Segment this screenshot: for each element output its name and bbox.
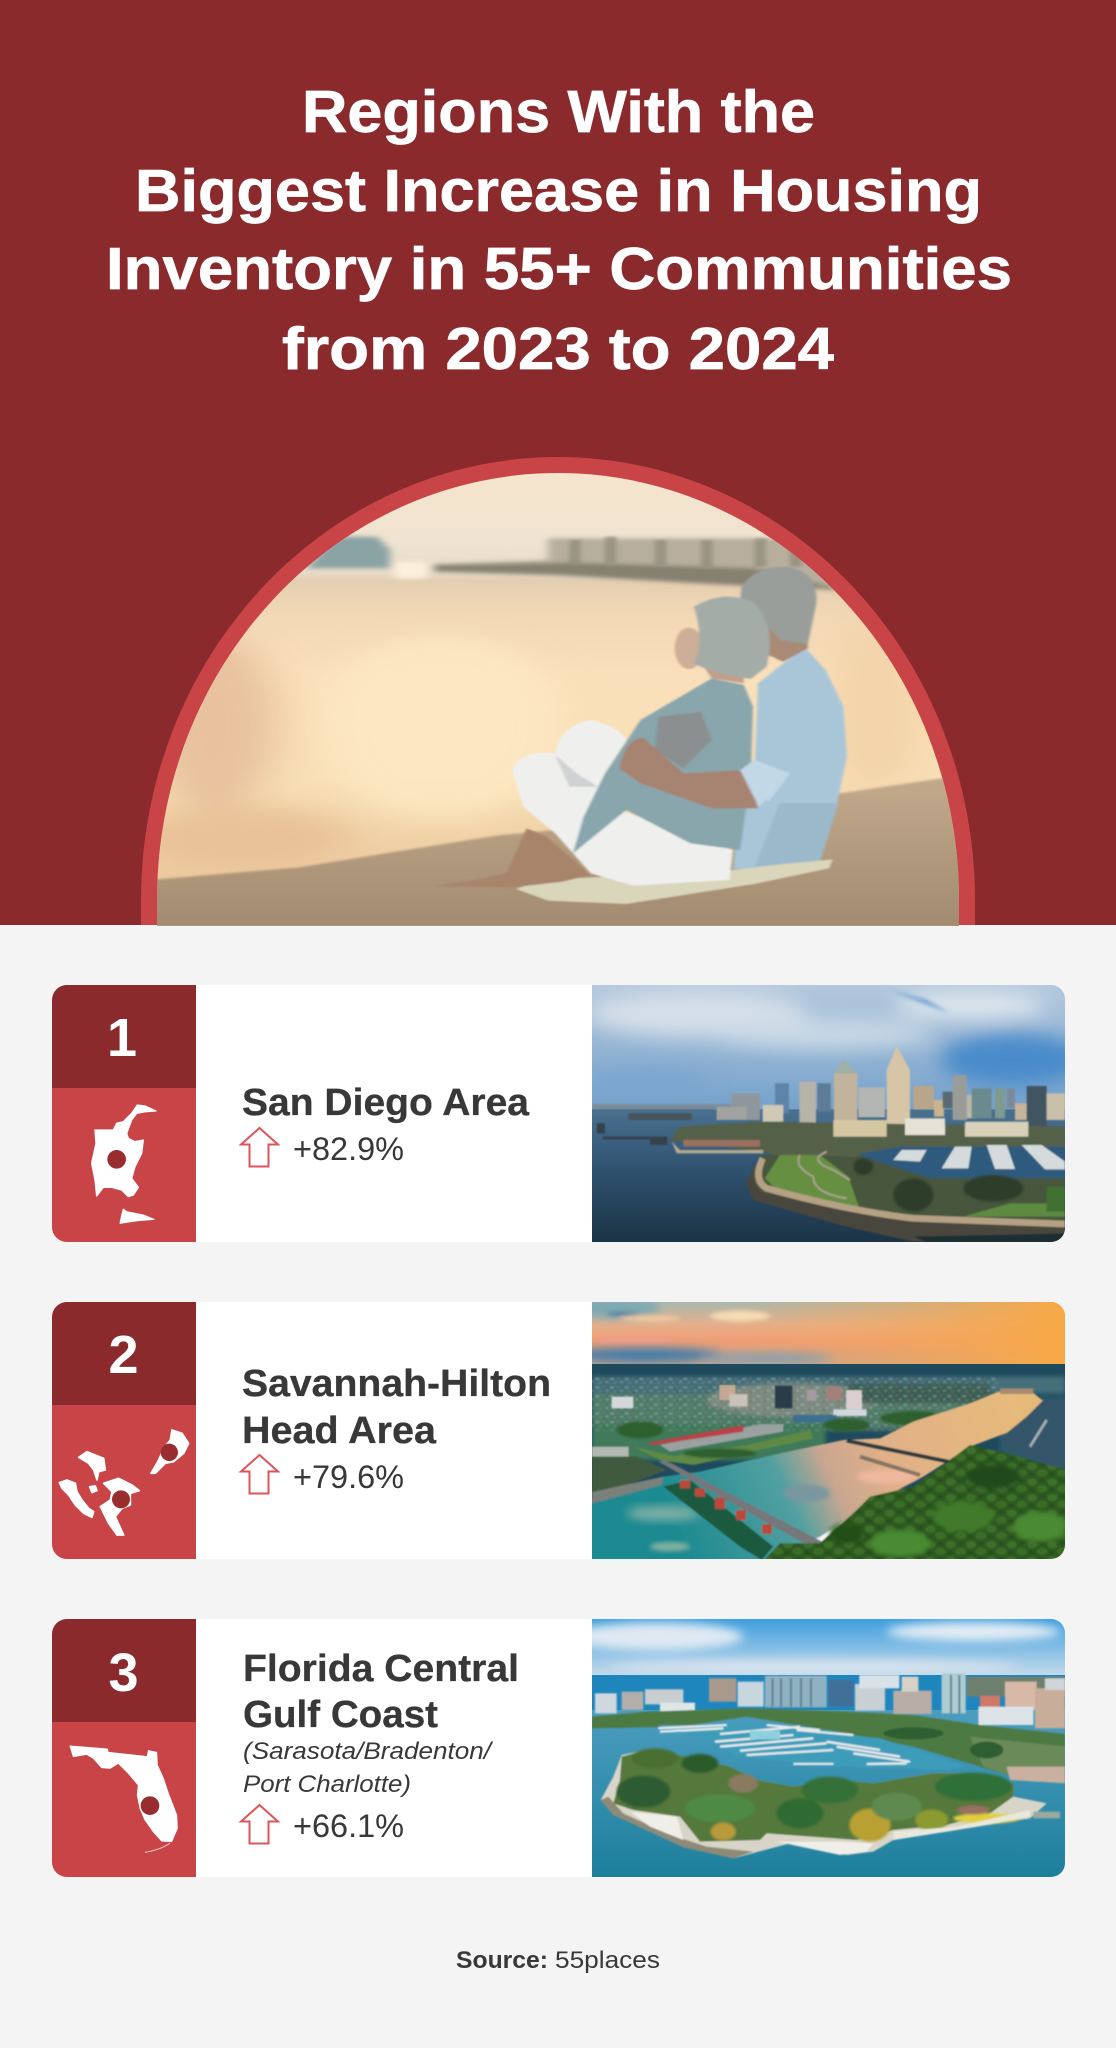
photo: San Diego skyline bbox=[583, 983, 1087, 1243]
icon: Savannah-Hilton Head map bbox=[59, 1430, 189, 1535]
card 3 white body bbox=[180, 1619, 600, 1877]
blanket bbox=[516, 859, 833, 904]
hero photo: couple on beach bbox=[135, 470, 975, 927]
man bbox=[733, 567, 847, 869]
title: Regions With the bbox=[302, 79, 815, 145]
card 3 rank block: 3 bbox=[108, 1643, 139, 1703]
card 2 region name bbox=[242, 1363, 551, 1452]
card 2 percentage: +79.6% bbox=[293, 1459, 404, 1495]
card 3 percentage: +66.1% bbox=[293, 1808, 404, 1844]
man's arm bbox=[619, 738, 758, 808]
card 1 region name: San Diego Area bbox=[242, 1082, 530, 1124]
card 1 rank block: 1 bbox=[107, 1008, 137, 1068]
truss bridge bbox=[847, 1441, 948, 1475]
card 2 rank block bbox=[52, 1302, 196, 1559]
icon: up arrow bbox=[241, 1805, 278, 1844]
woman bbox=[436, 597, 770, 887]
card 3: Florida Central Gulf Coast bbox=[52, 1617, 1067, 1880]
title: Inventory in 55+ Communities bbox=[106, 236, 1012, 302]
title: Biggest Increase in Housing bbox=[135, 158, 982, 224]
card 2: Savannah-Hilton Head Area bbox=[52, 1298, 1067, 1561]
marina bbox=[657, 1725, 967, 1770]
photo: Savannah river aerial bbox=[563, 1298, 1067, 1561]
title bbox=[106, 79, 1012, 382]
island bbox=[601, 1750, 1047, 1858]
card 2 white body bbox=[180, 1302, 600, 1559]
icon: San Diego map bbox=[92, 1105, 156, 1223]
card 3 rank block bbox=[52, 1619, 196, 1877]
icon: up arrow bbox=[241, 1128, 278, 1166]
trees bbox=[763, 1445, 1067, 1561]
hero arch frame bbox=[141, 457, 975, 925]
title: from 2023 to 2024 bbox=[282, 316, 834, 382]
card 2 region name: Savannah-Hilton bbox=[242, 1363, 551, 1405]
icon: Florida map bbox=[70, 1746, 177, 1852]
card 3 subtitle: (Sarasota/Bradenton/ bbox=[243, 1738, 494, 1765]
header panel bbox=[0, 0, 1116, 927]
card 3 region name bbox=[243, 1648, 519, 1736]
card 1 rank block bbox=[52, 985, 196, 1242]
card 3 region name: Florida Central bbox=[243, 1648, 519, 1690]
icon: up arrow bbox=[241, 1455, 278, 1494]
card 2 region name: Head Area bbox=[242, 1410, 437, 1452]
card 1 white body bbox=[180, 985, 600, 1242]
card 3 region name: Gulf Coast bbox=[243, 1694, 438, 1736]
photo: Sarasota marina aerial bbox=[570, 1617, 1067, 1880]
source line: Source: bbox=[456, 1947, 548, 1974]
source line bbox=[456, 1947, 660, 1974]
card 1: San Diego Area bbox=[52, 983, 1087, 1243]
card 1 percentage: +82.9% bbox=[293, 1131, 404, 1167]
card 3 subtitle bbox=[243, 1738, 494, 1798]
card 2 rank block: 2 bbox=[108, 1325, 139, 1385]
source line: 55places bbox=[555, 1947, 660, 1974]
card 3 subtitle: Port Charlotte) bbox=[243, 1771, 411, 1798]
